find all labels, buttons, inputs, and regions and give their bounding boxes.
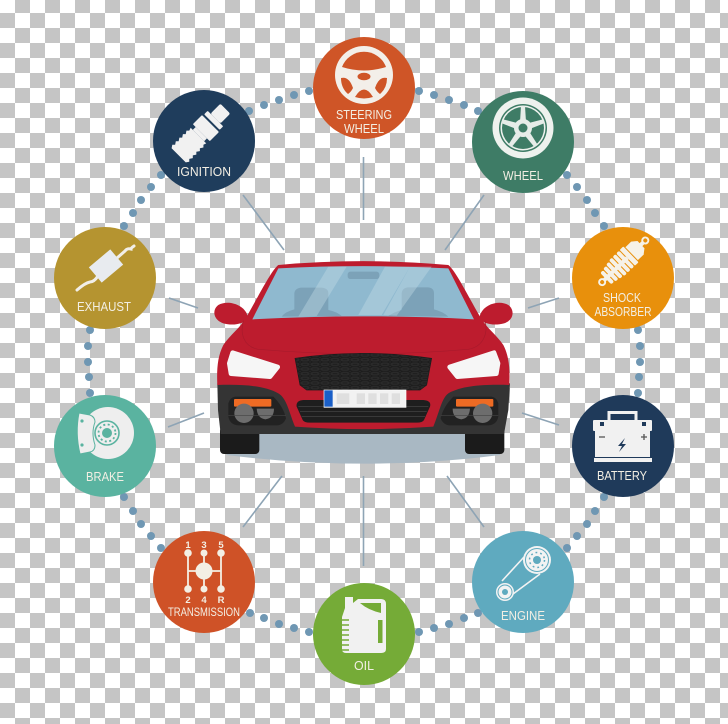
tyres xyxy=(220,427,504,454)
label: SHOCK xyxy=(603,290,641,305)
badge: exhaust xyxy=(54,227,156,329)
icon: wheel xyxy=(492,98,554,158)
mirrors xyxy=(214,303,513,324)
windshield streaks xyxy=(298,267,432,317)
label: BRAKE xyxy=(86,469,124,484)
label: STEERING xyxy=(336,107,392,122)
badge: ignition xyxy=(153,90,255,192)
left fog lamp xyxy=(228,397,286,425)
connector lines xyxy=(168,157,559,566)
label: IGNITION xyxy=(177,164,231,179)
icon: oil jug xyxy=(342,597,386,653)
icon: gear shifter: 3 xyxy=(201,540,207,551)
car xyxy=(214,261,513,464)
badge: battery xyxy=(572,395,674,497)
hood line xyxy=(242,321,486,354)
lower grille xyxy=(297,400,430,423)
label: ENGINE xyxy=(501,608,545,623)
icon: gear shifter: 1 xyxy=(185,540,191,551)
icon: gear shifter: R xyxy=(218,595,225,606)
icon: shock absorber xyxy=(592,230,655,292)
badge: wheel xyxy=(472,91,574,193)
badge: steering wheel: WHEEL xyxy=(344,121,384,136)
icon: steering wheel xyxy=(335,46,393,104)
dotted ring xyxy=(84,87,644,636)
icon: spark plug xyxy=(170,100,234,164)
lower bumper xyxy=(217,383,510,434)
licence plate xyxy=(324,390,406,407)
seats and mirror xyxy=(282,272,448,317)
icon: car battery xyxy=(593,412,652,462)
label: EXHAUST xyxy=(77,299,131,314)
badge: steering wheel xyxy=(313,37,415,139)
icon: belt and pulleys xyxy=(496,546,551,601)
badge: engine xyxy=(472,531,574,633)
right fog lamp xyxy=(441,397,498,425)
badge: oil xyxy=(313,583,415,685)
upper grille xyxy=(295,353,432,390)
badge: brake xyxy=(54,395,156,497)
label: OIL xyxy=(354,658,374,673)
headlights xyxy=(229,353,498,377)
icon: gear shifter: 4 xyxy=(201,595,207,606)
icon: exhaust xyxy=(77,246,134,290)
windshield xyxy=(252,266,474,319)
ground shadow xyxy=(227,434,500,464)
label: TRANSMISSION xyxy=(168,607,240,619)
icon: gear shifter: 2 xyxy=(185,595,191,606)
badge: transmission xyxy=(153,531,255,633)
car body xyxy=(217,261,510,429)
icon: gear shifter xyxy=(184,540,225,606)
label: WHEEL xyxy=(503,168,543,183)
label: BATTERY xyxy=(597,468,647,483)
badge: shock absorber xyxy=(572,227,674,329)
badge: shock absorber: ABSORBER xyxy=(594,304,652,319)
icon: gear shifter: 5 xyxy=(218,540,224,551)
icon: brake disc xyxy=(77,407,134,459)
